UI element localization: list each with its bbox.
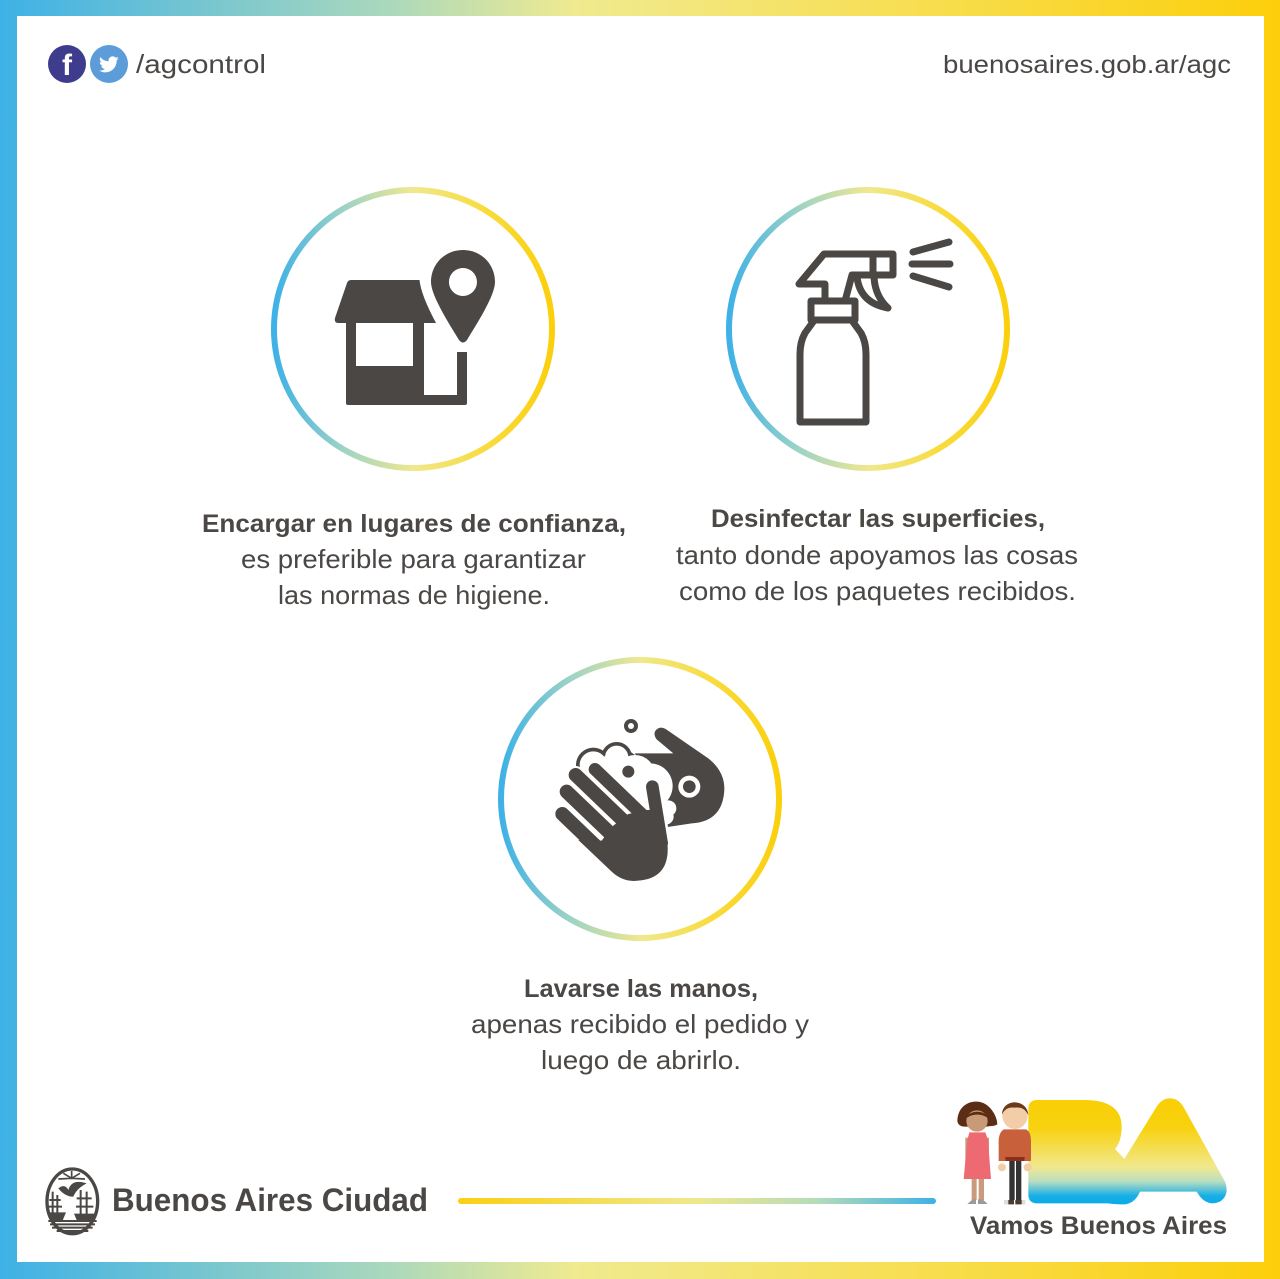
caption: Encargar en lugares de confianza, xyxy=(202,510,626,538)
icon: spray bottle xyxy=(799,242,950,422)
panel: encargar xyxy=(202,190,626,610)
icon: washing hands xyxy=(562,719,724,881)
ring xyxy=(501,660,779,938)
caption xyxy=(471,975,809,1075)
caption: como de los paquetes recibidos. xyxy=(679,576,1076,606)
icon: twitter xyxy=(90,45,128,83)
website url: buenosaires.gob.ar/agc xyxy=(943,51,1231,79)
icon: facebook: f xyxy=(62,49,73,82)
caption: es preferible para garantizar xyxy=(241,544,586,574)
footer logo: Vamos Buenos Aires xyxy=(957,1098,1227,1240)
wordmark: Buenos Aires Ciudad xyxy=(112,1182,428,1218)
caption: tanto donde apoyamos las cosas xyxy=(676,540,1078,570)
boy figure xyxy=(998,1102,1032,1204)
icon: facebook xyxy=(48,45,86,83)
panel: desinfectar xyxy=(676,190,1078,606)
caption xyxy=(676,505,1078,606)
social header xyxy=(48,45,266,83)
handle: /agcontrol xyxy=(136,49,266,79)
slogan: Vamos Buenos Aires xyxy=(970,1212,1227,1240)
caption xyxy=(202,510,626,610)
caption: Desinfectar las superficies, xyxy=(711,505,1045,533)
caption: apenas recibido el pedido y xyxy=(471,1009,809,1039)
gradient divider line xyxy=(458,1198,936,1204)
caption: luego de abrirlo. xyxy=(541,1045,741,1075)
caption: las normas de higiene. xyxy=(278,580,550,610)
panel: lavarse xyxy=(471,660,809,1075)
girl figure xyxy=(957,1102,997,1204)
caption: Lavarse las manos, xyxy=(524,975,758,1003)
ring xyxy=(729,190,1007,468)
icon: store and pin xyxy=(335,250,495,405)
footer logo: Buenos Aires Ciudad xyxy=(47,1169,428,1234)
ring xyxy=(274,190,552,468)
BA letters xyxy=(1028,1098,1227,1204)
icon: city emblem xyxy=(47,1169,98,1234)
